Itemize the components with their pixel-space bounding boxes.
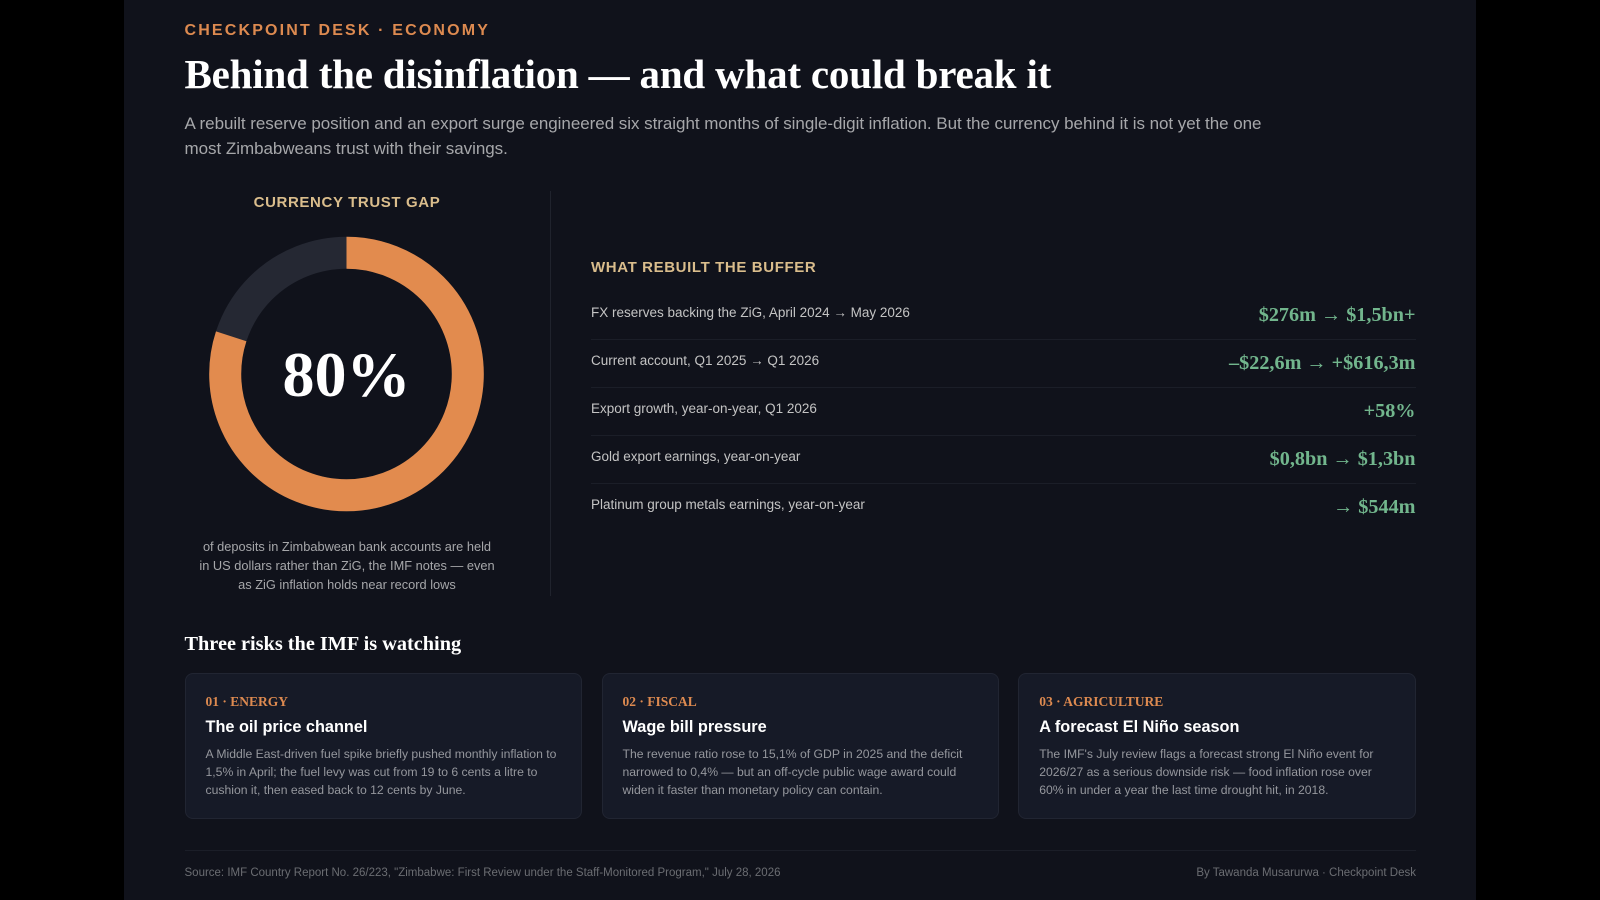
card text: 60% in under a year the last time drought hit, in 2018. (1039, 783, 1328, 797)
card title: A forecast El Niño season (1039, 718, 1239, 736)
caption: in US dollars rather than ZiG, the IMF notes — even (199, 558, 495, 573)
metric value: export growth: +58% (1364, 400, 1416, 422)
card: agriculture risk (1018, 672, 1416, 819)
footer source: Source: IMF Country Report No. 26/223, "Zimbabwe: First Review under the Staff-Monitored Program," July 28, 2026 (184, 867, 780, 879)
panel: currency trust gap (184, 191, 550, 596)
subtitle: A rebuilt reserve position and an export surge engineered six straight months of single-digit inflation. But the currency behind it is not yet the one (184, 114, 1261, 133)
heading: three risks: Three risks the IMF is watching (184, 632, 461, 654)
card text: 2026/27 as a serious downside risk — food inflation rose over (1039, 765, 1372, 779)
subtitle (184, 114, 1261, 158)
subtitle: most Zimbabweans trust with their savings. (184, 139, 508, 158)
donut chart: 80 percent (209, 236, 484, 512)
card title: The oil price channel (206, 718, 367, 736)
title: Behind the disinflation — and what could break it (184, 51, 1051, 97)
metric row: FX reserves: FX reserves backing the ZiG, April 2024 → May 2026 (591, 305, 910, 320)
caption: as ZiG inflation holds near record lows (238, 577, 456, 592)
caption (199, 539, 495, 592)
card text: narrowed to 0,4% — but an off-cycle public wage award could (622, 765, 956, 779)
card text: cushion it, then eased back to 12 cents by June. (206, 783, 466, 797)
heading: currency trust gap: CURRENCY TRUST GAP (254, 194, 440, 210)
metric row: platinum group metals: Platinum group metals earnings, year-on-year (591, 497, 865, 512)
card: fiscal risk (602, 672, 999, 819)
card text: A Middle East-driven fuel spike briefly pushed monthly inflation to (206, 746, 556, 760)
card title: Wage bill pressure (622, 718, 767, 736)
card text: 1,5% in April; the fuel levy was cut from 19 to 6 cents a litre to (206, 765, 537, 779)
metric row: export growth: Export growth, year-on-year, Q1 2026 (591, 401, 817, 416)
metric value: current account: –$22,6m → +$616,3m (1229, 352, 1416, 374)
metric row: gold export earnings: Gold export earnings, year-on-year (591, 449, 800, 464)
footer byline: By Tawanda Musarurwa · Checkpoint Desk (1196, 867, 1416, 879)
metric row: current account: Current account, Q1 2025 → Q1 2026 (591, 353, 819, 368)
card text (206, 746, 556, 797)
card tag: 01 · ENERGY (206, 694, 288, 708)
card text (622, 746, 962, 797)
eyebrow: CHECKPOINT DESK · ECONOMY (184, 22, 490, 39)
card: energy risk (184, 672, 582, 819)
card text (1039, 746, 1374, 797)
card text: widen it faster than monetary policy can contain. (622, 783, 883, 797)
card tag: 03 · AGRICULTURE (1039, 694, 1163, 708)
big number: 80% (282, 339, 410, 410)
metric value: gold export earnings: $0,8bn → $1,3bn (1270, 448, 1416, 470)
card text: The revenue ratio rose to 15,1% of GDP in 2025 and the deficit (622, 746, 962, 760)
metric value: platinum group metals: → $544m (1333, 496, 1416, 518)
caption: of deposits in Zimbabwean bank accounts are held (203, 539, 491, 554)
metric value: FX reserves: $276m → $1,5bn+ (1259, 304, 1416, 326)
heading: what rebuilt the buffer: WHAT REBUILT THE BUFFER (591, 259, 816, 276)
card tag: 02 · FISCAL (622, 694, 697, 708)
card text: The IMF's July review flags a forecast strong El Niño event for (1039, 746, 1373, 760)
